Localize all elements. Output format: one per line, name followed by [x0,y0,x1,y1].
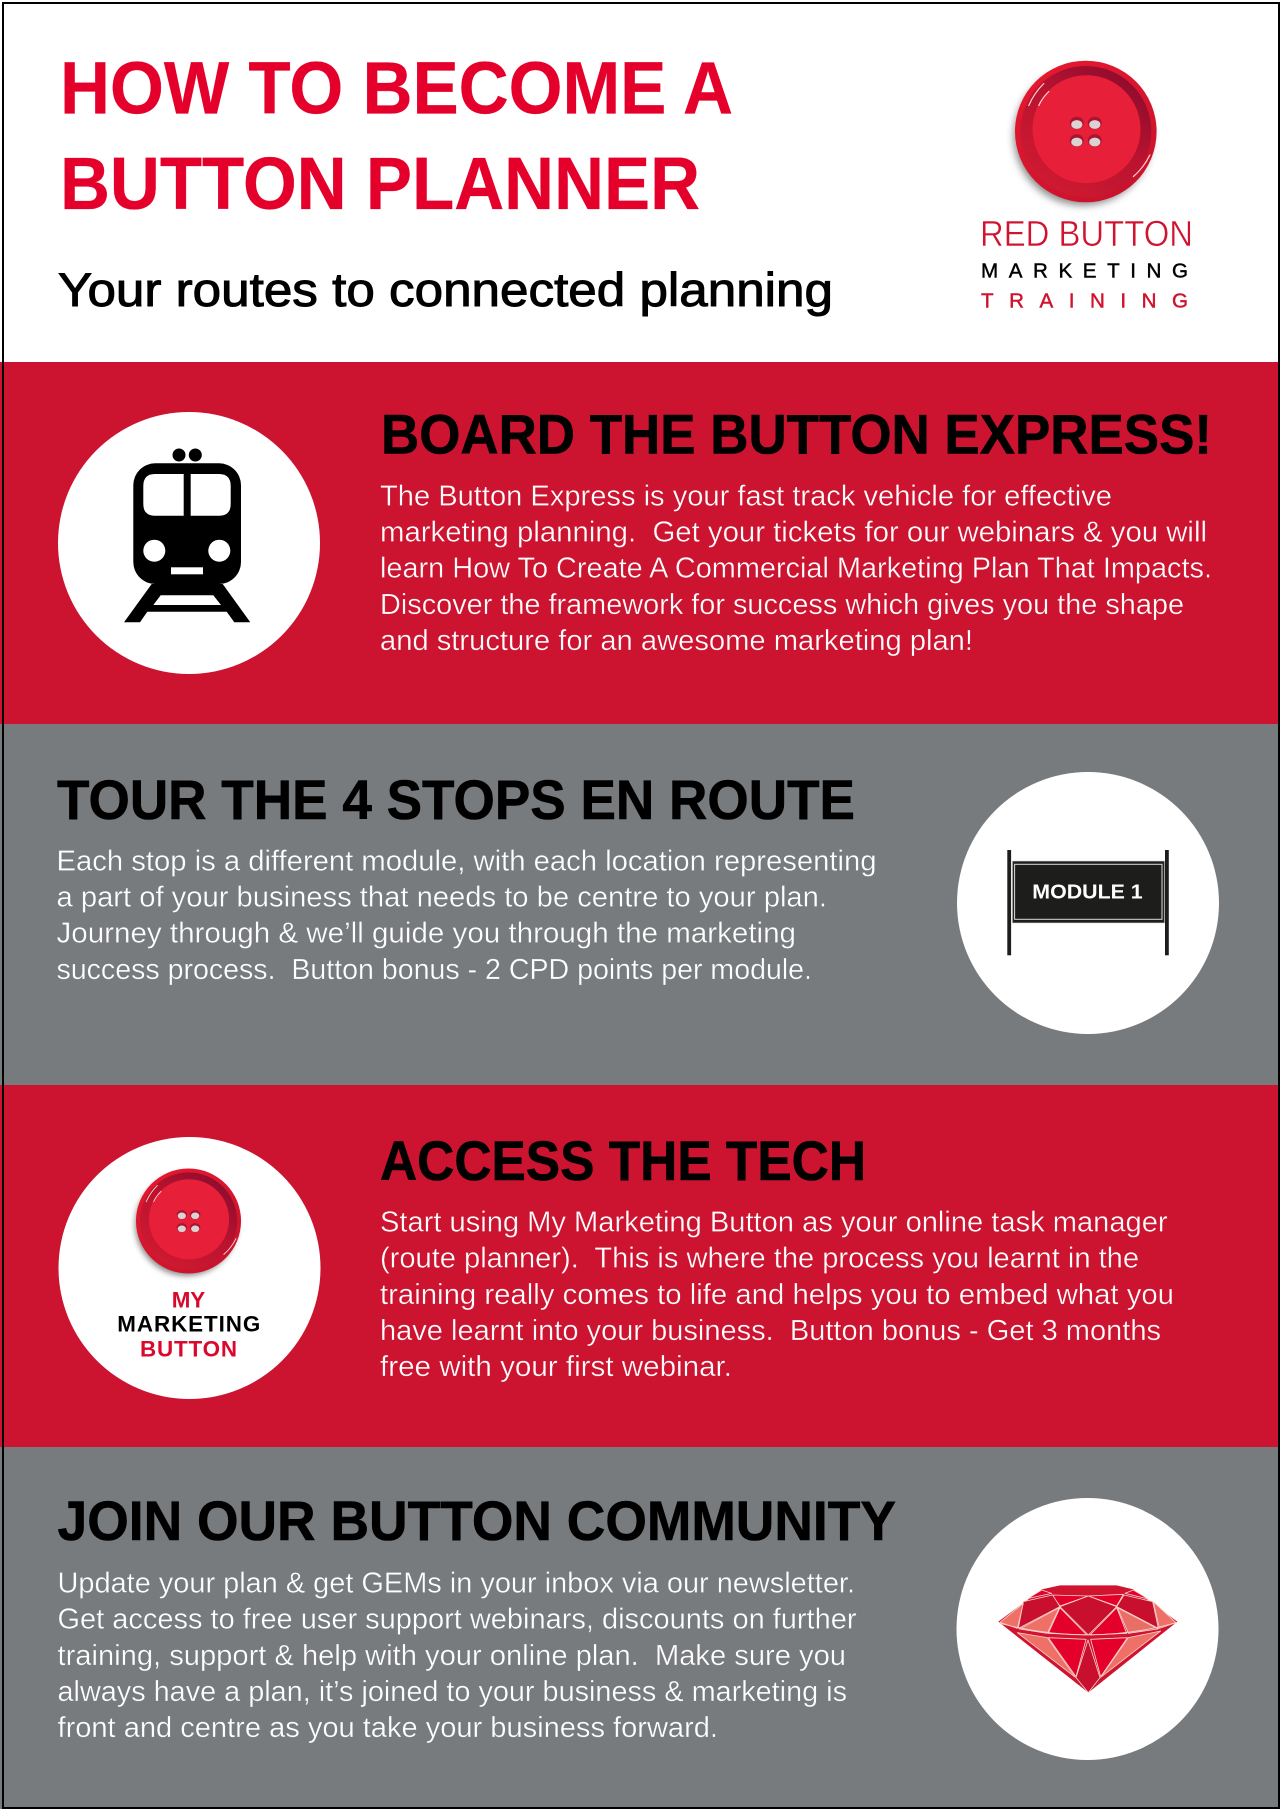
icon: ruby gem in white circle [956,1498,1218,1760]
panel: board the button express [0,362,1280,724]
text block [56,846,876,986]
text block: front and centre as you take your business forward. [58,1712,718,1744]
text block: Discover the framework for success which gives you the shape [380,589,1184,621]
text block: marketing planning. Get your tickets for our webinars & you will [380,517,1207,549]
text block [380,1207,1174,1383]
title [60,47,733,225]
heading: TOUR THE 4 STOPS EN ROUTE [57,768,855,831]
text block: Update your plan & get GEMs in your inbox via our newsletter. [58,1568,855,1600]
text block: Start using My Marketing Button as your online task manager [380,1207,1168,1239]
text block: Journey through & we’ll guide you through the marketing [56,918,796,950]
title: HOW TO BECOME A [60,47,733,130]
text block: The Button Express is your fast track vehicle for effective [380,481,1112,513]
icon: module 1 sign in white circle: MODULE 1 [1032,880,1143,903]
icon: my marketing button logo in white circle: BUTTON [140,1337,237,1362]
text block: (route planner). This is where the process you learnt in the [380,1243,1139,1275]
icon: my marketing button logo in white circle: MARKETING [117,1312,260,1337]
subtitle: Your routes to connected planning [58,263,833,316]
icon: my marketing button logo in white circle [58,1137,320,1399]
heading: BOARD THE BUTTON EXPRESS! [381,402,1212,465]
text block: have learnt into your business. Button bonus - Get 3 months [380,1315,1161,1347]
text block: Each stop is a different module, with each location representing [56,846,876,878]
text block: success process. Button bonus - 2 CPD points per module. [56,954,812,986]
title: BUTTON PLANNER [60,142,700,225]
text block: always have a plan, it’s joined to your business & marketing is [58,1676,847,1708]
heading: JOIN OUR BUTTON COMMUNITY [58,1489,896,1552]
panel: header [0,0,1280,362]
text block: and structure for an awesome marketing plan! [380,625,973,657]
panel: tour the 4 stops en route [0,724,1280,1085]
logo wordmark [980,213,1193,312]
logo wordmark: MARKETING [981,259,1188,282]
panel: access the tech [0,1085,1280,1447]
text block: free with your first webinar. [380,1351,732,1383]
text block: a part of your business that needs to be centre to your plan. [56,882,827,914]
logo wordmark: RED BUTTON [980,213,1193,254]
icon: module 1 sign in white circle [957,772,1219,1034]
text block: learn How To Create A Commercial Marketing Plan That Impacts. [380,553,1212,585]
heading: ACCESS THE TECH [380,1129,866,1192]
panel: join our button community [0,1447,1280,1809]
logo wordmark: TRAINING [981,289,1188,312]
text block [58,1568,857,1744]
logo: Red Button Marketing Training [980,61,1193,312]
text block: training, support & help with your online plan. Make sure you [58,1640,846,1672]
icon: train in white circle [58,412,320,674]
text block: Get access to free user support webinars, discounts on further [58,1604,857,1636]
text block: training really comes to life and helps you to embed what you [380,1279,1174,1311]
icon: my marketing button logo in white circle: MY [172,1287,205,1312]
icon: red button [1014,61,1157,206]
text block [380,481,1212,657]
